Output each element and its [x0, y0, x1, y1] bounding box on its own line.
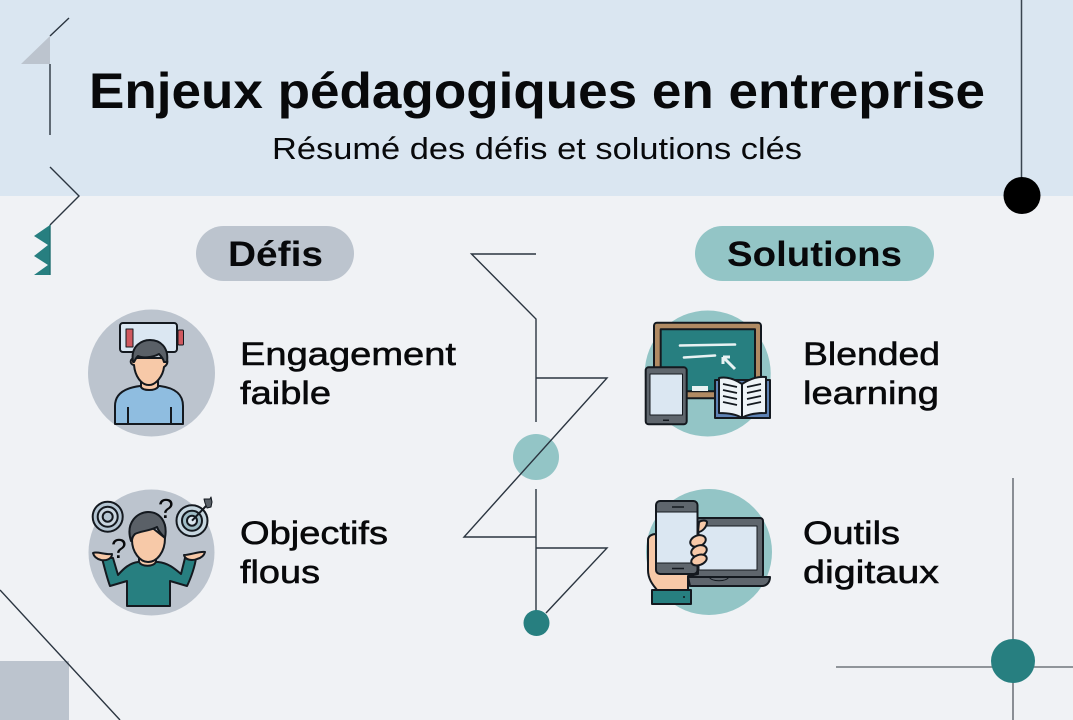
icon: hand holding phone with laptop [646, 489, 772, 615]
icon: confused person with targets: ? [111, 533, 127, 564]
decoration: top-right pendulum [1004, 0, 1040, 214]
label: Outils digitaux: digitaux [803, 554, 939, 590]
label: Blended learning: Blended [803, 336, 940, 372]
label: Engagement faible: faible [240, 375, 331, 411]
decoration: left zigzag with teal teeth [34, 167, 79, 275]
decoration: bottom-right crosshair [836, 478, 1073, 720]
heading pill: Solutions [695, 226, 934, 281]
label: Objectifs flous [240, 515, 388, 590]
title: Enjeux pédagogiques en entreprise [89, 63, 985, 119]
label: Outils digitaux: Outils [803, 515, 900, 551]
heading pill: Défis: Défis [228, 235, 323, 274]
decoration: top-left triangle and lines [21, 18, 69, 135]
label: Blended learning [803, 336, 940, 411]
icon: blackboard, tablet and book [645, 310, 771, 436]
icon: low-battery person [88, 310, 215, 436]
label: Objectifs flous: Objectifs [240, 515, 388, 551]
subtitle: Résumé des défis et solutions clés [272, 131, 802, 166]
decoration: central connector lines and nodes [464, 254, 607, 636]
label: Engagement faible: Engagement [240, 336, 456, 372]
heading pill: Défis [196, 226, 354, 281]
icon: confused person with targets [88, 490, 214, 616]
header band [0, 0, 1073, 196]
decoration: bottom-left square and diagonal [0, 590, 120, 720]
icon: confused person with targets: ? [158, 493, 174, 524]
label: Objectifs flous: flous [240, 554, 320, 590]
label: Outils digitaux [803, 515, 939, 590]
heading pill: Solutions: Solutions [727, 235, 902, 274]
label: Engagement faible [240, 336, 456, 411]
label: Blended learning: learning [803, 375, 939, 411]
